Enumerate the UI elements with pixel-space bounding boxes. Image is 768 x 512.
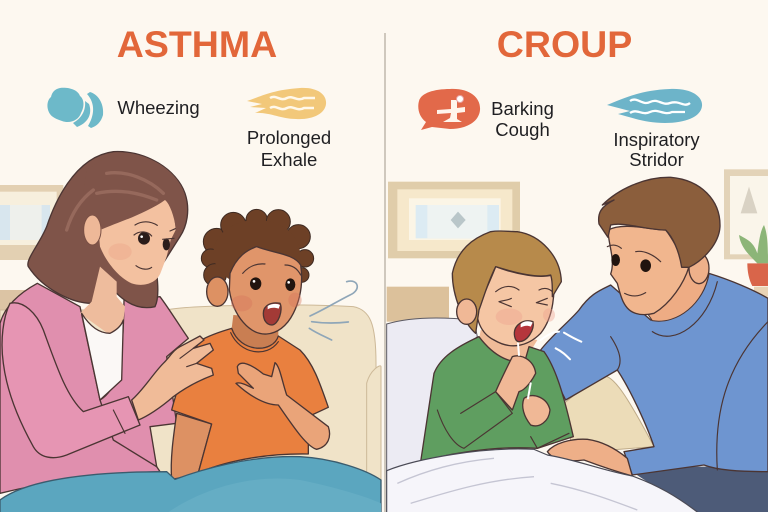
- white shirt: [82, 313, 123, 400]
- divider: [384, 33, 386, 512]
- fist at throat: [496, 356, 536, 410]
- label: inspiratory stridor: Stridor: [629, 149, 684, 170]
- ear: [457, 299, 477, 324]
- label: barking cough: Cough: [495, 119, 550, 140]
- neck: [479, 330, 537, 363]
- bangs: [80, 152, 187, 229]
- icon: barking cough bubble: [418, 89, 480, 130]
- label: inspiratory stridor: Inspiratory: [613, 129, 700, 150]
- icon: prolonged exhale: [247, 88, 326, 119]
- neck: [647, 263, 709, 321]
- sweater arm: [437, 392, 569, 448]
- mouth: [136, 266, 152, 269]
- eyes and brows: [243, 264, 301, 291]
- boy: [421, 231, 573, 462]
- panel: croup: [387, 23, 768, 512]
- label: prolonged exhale: Prolonged: [247, 127, 331, 148]
- neck: [80, 267, 125, 335]
- curly hair: [201, 209, 314, 287]
- closed eyes and brows: [496, 286, 552, 307]
- panel: asthma: [0, 23, 381, 512]
- wall frame with picture: [388, 182, 520, 258]
- sideboard: [387, 287, 449, 322]
- pillow: [387, 318, 477, 472]
- sofa: [0, 305, 381, 483]
- second fist: [523, 396, 550, 426]
- second frame: [724, 169, 768, 259]
- sideboard: [0, 290, 43, 310]
- heading: asthma: ASTHMA: [117, 23, 277, 65]
- sweater: [541, 273, 768, 475]
- face: [608, 226, 689, 315]
- label: prolonged exhale: Exhale: [261, 149, 317, 170]
- cardigan: [0, 283, 160, 493]
- jeans: [624, 467, 768, 512]
- heading: croup: CROUP: [497, 23, 632, 65]
- breath lines: [309, 281, 357, 340]
- blanket: [0, 457, 381, 512]
- label: barking cough: Barking: [491, 98, 554, 119]
- eyes: [607, 245, 661, 272]
- hair back: [28, 152, 188, 308]
- mouth: [625, 293, 646, 296]
- sleeve: [2, 303, 140, 458]
- mother: [0, 152, 188, 493]
- neck: [232, 315, 278, 348]
- open mouth: [263, 303, 281, 325]
- label: wheezing: Wheezing: [117, 97, 200, 118]
- ear: [84, 215, 101, 245]
- t-shirt: [172, 328, 328, 473]
- arm: [171, 413, 212, 479]
- father's hand: [547, 439, 632, 476]
- scene: mother and child on sofa: [0, 152, 381, 512]
- father: [541, 177, 768, 512]
- hair: [599, 177, 720, 267]
- open mouth: [514, 321, 533, 342]
- wall frame: [0, 185, 63, 260]
- hair: [452, 231, 561, 333]
- cough air lines: [518, 332, 581, 398]
- eyes: [134, 222, 175, 250]
- face: [98, 200, 176, 285]
- face: [229, 247, 302, 334]
- chest hand: [236, 363, 330, 449]
- ear: [689, 253, 709, 284]
- mother's hand on shoulder: [132, 336, 213, 420]
- ear: [207, 277, 228, 306]
- potted plant: [739, 225, 768, 297]
- icon: inspiratory stridor: [607, 89, 702, 123]
- sofa: [564, 375, 654, 450]
- boy: [171, 209, 330, 479]
- scene: father and child in bed: [387, 169, 768, 512]
- green sweater: [421, 337, 573, 462]
- icon: wheezing cloud: [47, 88, 103, 128]
- face: [477, 267, 554, 346]
- white blanket: [387, 449, 699, 512]
